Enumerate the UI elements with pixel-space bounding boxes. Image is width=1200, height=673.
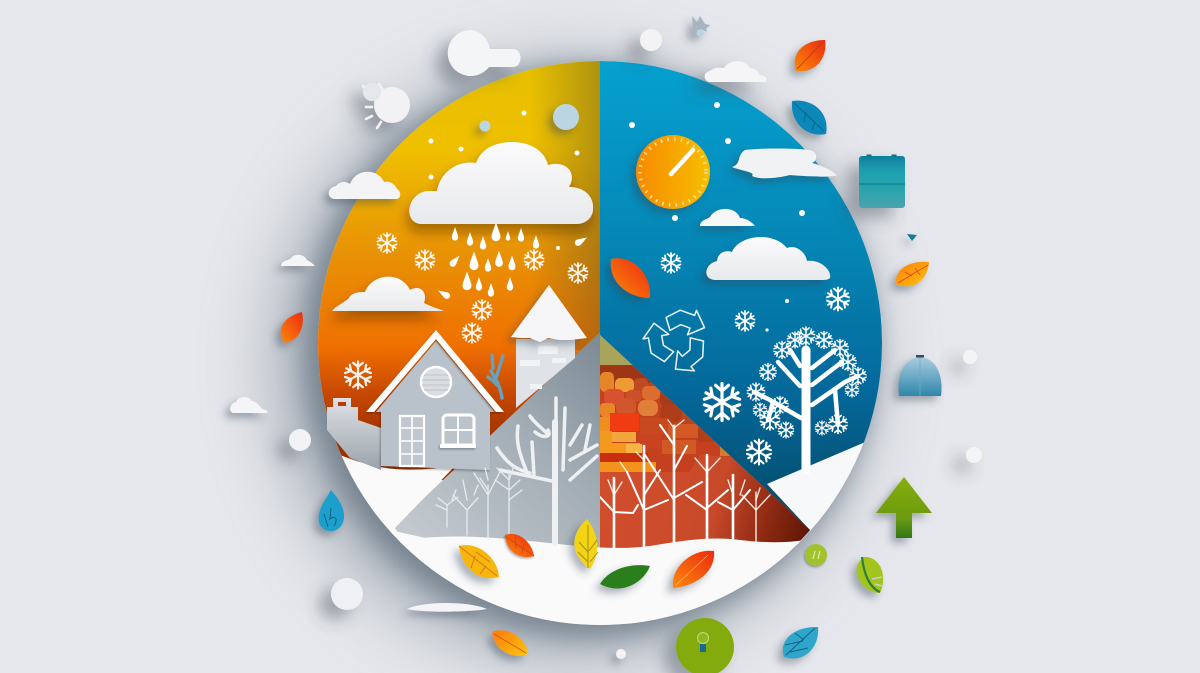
panel: white foreground snow [400, 536, 801, 625]
panel: brick wedge [600, 330, 820, 560]
panel: winter blue sector [600, 61, 882, 530]
icon: cloud top right [705, 61, 767, 82]
icon: green circle with bulb [676, 618, 734, 673]
icon: blue drop leaf [319, 490, 344, 531]
icon: lime dot [805, 544, 827, 566]
icon: recycle symbol [641, 301, 714, 380]
icon: red floating leaf [611, 258, 650, 298]
icon: flower top [690, 16, 710, 38]
icon: gray wedge small trees [436, 466, 522, 538]
icon: orange left leaf [281, 312, 303, 343]
left window [400, 416, 424, 466]
panel: snowy hill under tree [766, 442, 864, 540]
icon: blue-panel white dots [629, 102, 805, 332]
icon: lens stroke bottom [407, 603, 487, 612]
icon: orange right leaf [896, 262, 929, 286]
icon: red leaf [673, 551, 714, 588]
icon: big rain cloud [409, 142, 593, 224]
icon: keyhole cloud top [448, 30, 520, 76]
icon: small cloud top left of disc [329, 172, 400, 199]
icon: autumn snowflakes [344, 233, 588, 388]
icon: large dot bottom left [331, 578, 363, 610]
icon: orange leaf bottom [492, 630, 528, 656]
icon: green leaf [600, 565, 650, 589]
icon: blue dome [898, 355, 942, 396]
brick wedge trees [600, 420, 770, 550]
icon: stone tower [511, 285, 587, 408]
icon: green veined leaf [856, 557, 883, 593]
round vent [421, 367, 451, 397]
panel: autumn warm quadrant [310, 60, 600, 480]
icon: large snowy tree [747, 327, 867, 470]
disc broad cast shadow [278, 70, 862, 654]
icon: red leaf top right [795, 40, 825, 71]
icon: tiny cloud left [281, 255, 315, 266]
icon: circle top center [640, 29, 662, 51]
icon: green up arrow [876, 477, 932, 538]
icon: dot right [963, 350, 977, 364]
icon: flat cloud right [732, 148, 837, 178]
icon: yellow leaf [574, 519, 598, 569]
white block left [327, 398, 381, 470]
icon: small cloud blue [700, 209, 755, 226]
icon: blue leaf [792, 101, 827, 135]
roof shingles [600, 365, 810, 552]
icon: house [327, 330, 504, 470]
icon: teal box [859, 155, 905, 208]
white snow base [310, 60, 890, 630]
seasons disc [310, 60, 900, 640]
icon: mid cloud left [332, 277, 444, 311]
icon: clock [636, 135, 710, 209]
right window [443, 415, 474, 445]
icon: small dot bottom [616, 649, 626, 659]
icon: sun [363, 83, 410, 128]
disc tight cast shadow [304, 65, 876, 637]
icon: small teal arrow [907, 234, 917, 241]
icon: orange-yellow leaf [459, 545, 499, 578]
icon: large cloud blue [706, 237, 830, 280]
icon: dot right lower [966, 447, 982, 463]
icon: teal leaf [783, 627, 818, 658]
icon: orange small leaf [505, 534, 534, 557]
icon: white dots and small blue balls [428, 104, 580, 250]
panel: gray wedge [390, 332, 600, 548]
lower brick wall [600, 455, 810, 552]
icon: raindrops [436, 222, 589, 300]
icon: dot left [289, 429, 311, 451]
icon: bare blue branch [488, 355, 503, 398]
icon: cloud left lower [230, 397, 268, 413]
icon: winter snowflakes [661, 253, 850, 464]
panel: snow hill left under house [342, 456, 452, 549]
icon: gray wedge large bare tree [497, 398, 597, 543]
